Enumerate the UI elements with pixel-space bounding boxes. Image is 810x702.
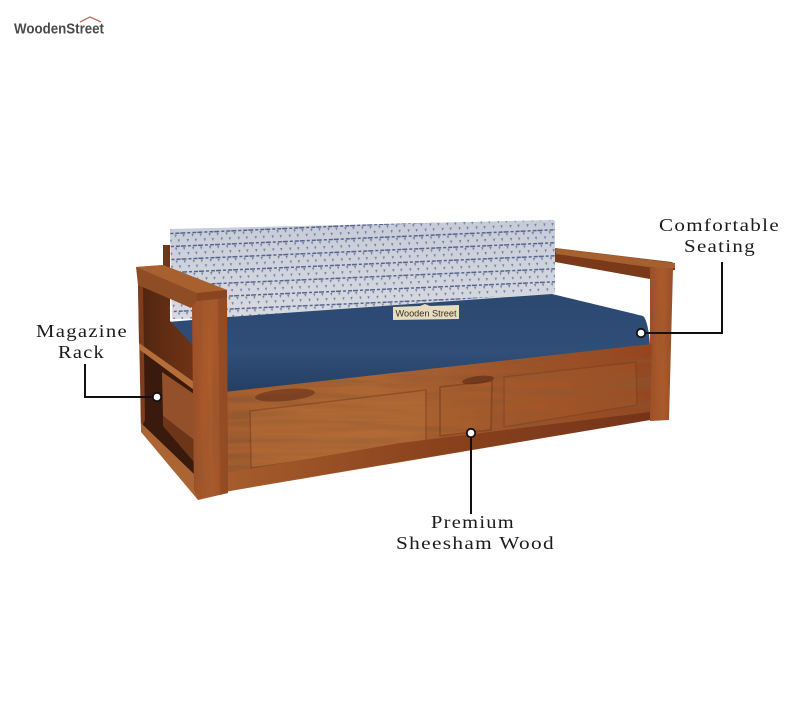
magazine rack side xyxy=(138,283,198,500)
left front leg xyxy=(192,298,228,500)
left arm top xyxy=(136,265,227,308)
label text: Premium xyxy=(431,512,515,532)
callout: Magazine Rack xyxy=(36,321,161,401)
panel recess right xyxy=(504,362,637,427)
label text: Comfortable xyxy=(659,215,780,235)
rack base xyxy=(141,423,198,500)
lower rack side wood xyxy=(162,372,194,440)
callout: Magazine Rack: Rack xyxy=(58,342,105,362)
leader line xyxy=(470,433,472,514)
leader line xyxy=(85,364,157,397)
callout: Premium Sheesham Wood xyxy=(396,429,555,553)
lower rack back, dark xyxy=(140,348,198,498)
marker dot xyxy=(637,329,645,337)
logo: Wooden Street xyxy=(14,17,104,38)
panel recess centre xyxy=(440,381,492,436)
marker dot xyxy=(153,393,161,401)
leader line xyxy=(641,262,722,333)
lower rail shadow xyxy=(226,412,650,491)
dark knot in wood xyxy=(255,386,315,404)
label text: Magazine xyxy=(36,321,128,341)
marker dot xyxy=(467,429,475,437)
callout: Comfortable Seating: Seating xyxy=(684,236,756,256)
upper rack back xyxy=(138,284,194,384)
logo wordmark: WoodenStreet xyxy=(14,22,104,38)
outer rack post xyxy=(138,283,145,428)
seat cushion xyxy=(168,294,650,393)
right arm rest xyxy=(555,248,675,421)
storage box front xyxy=(224,344,652,492)
panel recess left xyxy=(250,390,426,468)
back cushion xyxy=(170,220,555,319)
sofa illustration xyxy=(136,220,675,500)
logo roof icon xyxy=(80,17,101,22)
rack shelf xyxy=(139,343,194,390)
left back post xyxy=(163,245,170,269)
callout: Comfortable Seating xyxy=(637,215,780,337)
seat brand tag xyxy=(393,304,459,320)
seat brand tag: Wooden Street xyxy=(396,308,457,320)
callout: Premium Sheesham Wood: Sheesham Wood xyxy=(396,533,555,553)
